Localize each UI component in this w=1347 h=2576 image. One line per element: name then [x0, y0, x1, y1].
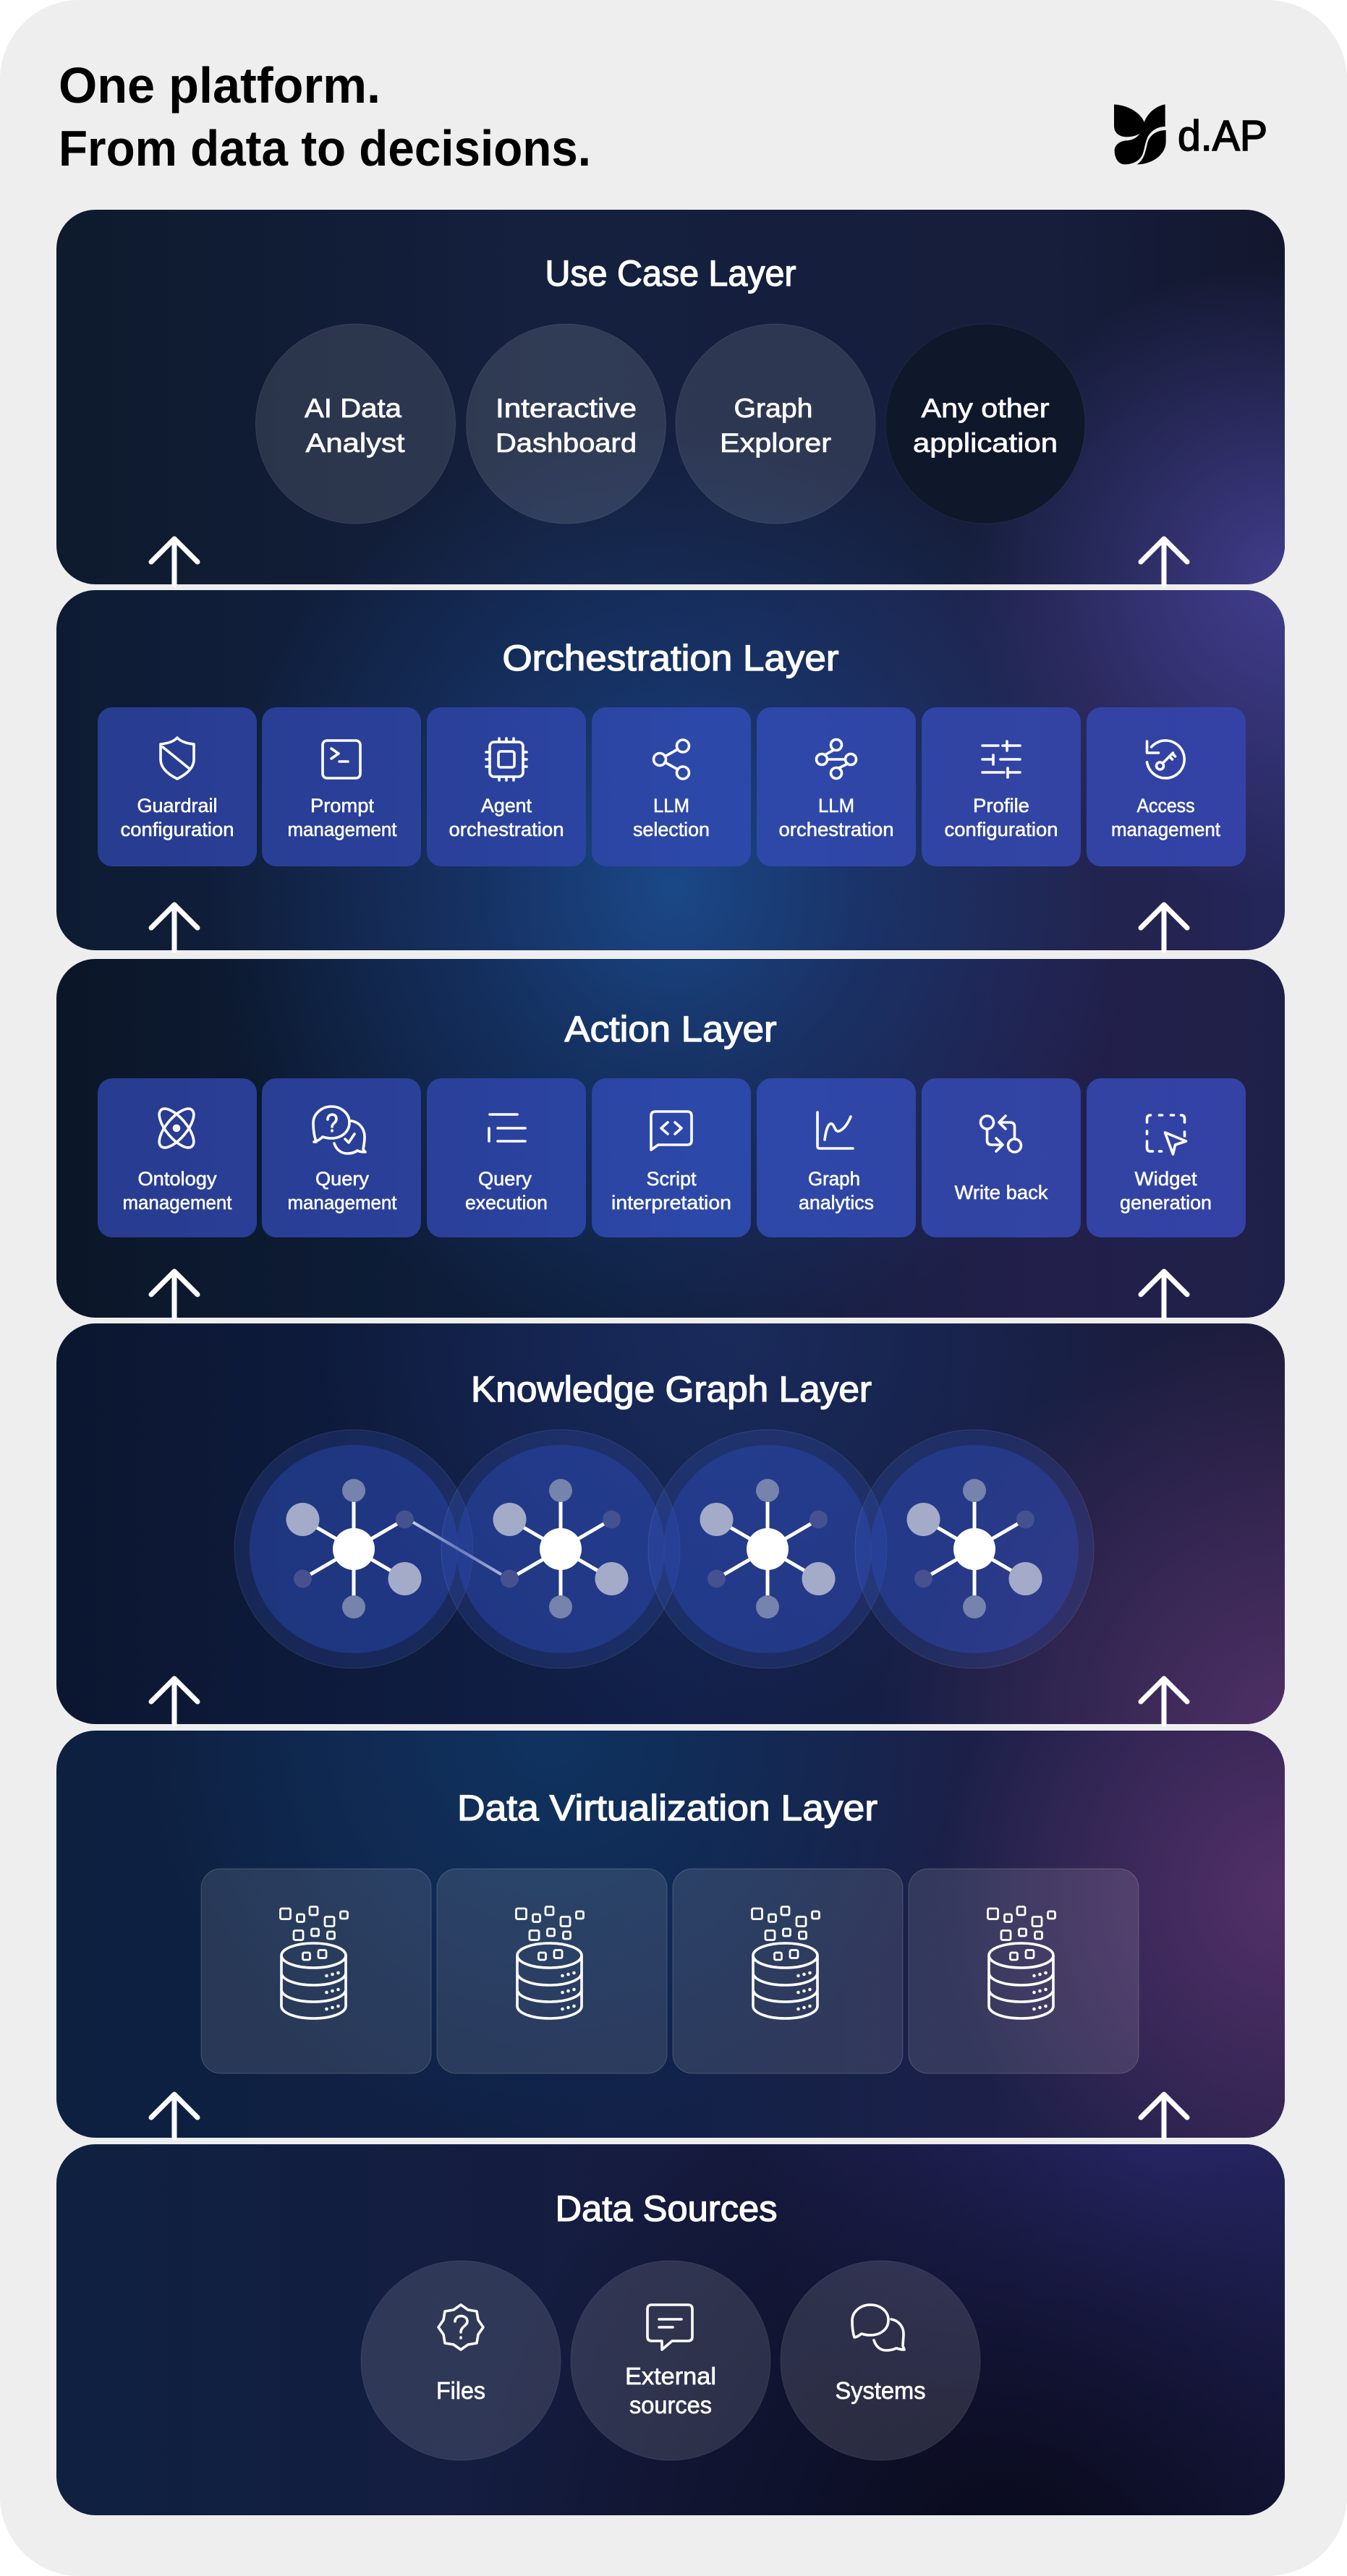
arrow: left, action [151, 1271, 197, 1318]
card: Access management [1087, 707, 1246, 866]
panel: Orchestration Layer [56, 590, 1285, 950]
circle: Systems [781, 2261, 980, 2460]
card: LLM orchestration: orchestration [778, 819, 894, 840]
card: Profile configuration: Profile [973, 795, 1029, 816]
card: Query execution: execution [465, 1192, 548, 1214]
icon: terminal [323, 741, 360, 778]
circle: Files: Files [436, 2377, 485, 2404]
panel: Data Sources [56, 2144, 1285, 2515]
arrow: left, knowledge graph [151, 1679, 197, 1724]
icon: message [647, 2305, 692, 2350]
card: Prompt management: management [288, 819, 397, 840]
circle: External sources [571, 2261, 770, 2460]
card: Profile configuration [922, 707, 1081, 866]
card: Widget generation: generation [1120, 1192, 1212, 1214]
title: From data to decisions. [59, 120, 591, 176]
arrow: left, use case [151, 539, 197, 584]
card: Write back: Write back [955, 1182, 1048, 1203]
icon: key refresh [1147, 741, 1184, 778]
circle: Interactive Dashboard: Dashboard [496, 428, 637, 458]
icon: shield [161, 738, 194, 779]
card: Write back [922, 1078, 1081, 1237]
card: Query management [262, 1078, 421, 1237]
card: Prompt management [262, 707, 421, 866]
arrow: right, data virtualization [1141, 2094, 1187, 2138]
arrow: left, orchestration [151, 905, 197, 950]
card: Access management: management [1111, 819, 1221, 840]
circle: Graph Explorer [676, 324, 875, 524]
icon: question badge [438, 2305, 483, 2350]
icon: sliders [982, 741, 1020, 777]
icon: database [517, 1906, 583, 2018]
circle: Graph Explorer: Explorer [720, 428, 831, 458]
card: Script interpretation [592, 1078, 751, 1237]
card: LLM orchestration: LLM [818, 795, 854, 816]
logo: d.AP: d.AP [1178, 112, 1267, 160]
icon: code bubble [651, 1112, 692, 1150]
heading: Orchestration Layer: Orchestration Layer [502, 638, 839, 678]
heading: Data Sources: Data Sources [556, 2188, 777, 2229]
circle: Systems: Systems [835, 2377, 926, 2404]
card: Graph analytics: analytics [799, 1192, 874, 1214]
circle: Graph Explorer: Graph [734, 393, 813, 423]
card: Ontology management: management [123, 1192, 232, 1214]
circle: Interactive Dashboard [466, 324, 666, 524]
link between clusters [413, 1522, 501, 1574]
icon: sync branches [981, 1116, 1021, 1152]
graph node cluster 3 [648, 1430, 887, 1668]
icon: database [988, 1906, 1055, 2018]
arrow: right, orchestration [1141, 905, 1187, 950]
panel: Knowledge Graph Layer [56, 1323, 1285, 1724]
arrow: right, knowledge graph [1141, 1679, 1187, 1724]
card: Prompt management: Prompt [310, 795, 375, 816]
card: Access management: Access [1137, 795, 1195, 816]
circle: Any other application: application [913, 428, 1058, 458]
card: database 2 [437, 1869, 667, 2073]
card: Ontology management: Ontology [137, 1168, 217, 1190]
icon: question and check bubbles [313, 1106, 365, 1153]
circle: Files [361, 2261, 561, 2460]
circle: Any other application: Any other [922, 393, 1049, 423]
card: Ontology management [98, 1078, 257, 1237]
heading: Knowledge Graph Layer: Knowledge Graph Layer [471, 1369, 872, 1409]
icon: line chart [817, 1112, 853, 1148]
icon: atom [153, 1104, 200, 1153]
card: Agent orchestration [427, 707, 586, 866]
card: database 1 [201, 1869, 431, 2073]
panel: Action Layer [56, 959, 1285, 1318]
circle: AI Data Analyst [256, 324, 456, 524]
card: LLM selection: LLM [653, 795, 689, 816]
icon: list lines [489, 1114, 525, 1141]
heading: Data Virtualization Layer: Data Virtualization Layer [457, 1788, 878, 1828]
icon: database [752, 1906, 819, 2018]
card: Widget generation [1087, 1078, 1246, 1237]
arrow: left, data virtualization [151, 2094, 197, 2138]
circle: Interactive Dashboard: Interactive [496, 393, 637, 423]
graph node cluster 2 [441, 1430, 680, 1668]
card: Query execution [427, 1078, 586, 1237]
card: Profile configuration: configuration [945, 819, 1058, 840]
heading: Action Layer: Action Layer [564, 1009, 777, 1049]
card: database 4 [909, 1869, 1139, 2073]
card: Guardrail configuration [98, 707, 257, 866]
card: Query management: Query [315, 1168, 370, 1190]
heading: Use Case Layer: Use Case Layer [545, 253, 796, 294]
arrow: right, use case [1141, 539, 1187, 584]
card: LLM orchestration [757, 707, 916, 866]
icon: network [816, 739, 857, 778]
title: One platform. [59, 57, 381, 114]
circle: AI Data Analyst: Analyst [305, 428, 405, 458]
graph node cluster 4 [855, 1430, 1094, 1668]
arrow: right, action [1141, 1271, 1187, 1318]
panel: Data Virtualization Layer [56, 1731, 1285, 2138]
title [59, 57, 591, 176]
card: Agent orchestration: orchestration [449, 819, 564, 840]
circle: AI Data Analyst: AI Data [305, 393, 401, 423]
card: Guardrail configuration: Guardrail [137, 795, 217, 816]
card: LLM selection [592, 707, 751, 866]
card: LLM selection: selection [633, 819, 710, 840]
icon: chat bubbles [852, 2305, 904, 2350]
card: Query execution: Query [478, 1168, 532, 1190]
card: Graph analytics [757, 1078, 916, 1237]
graph node cluster 1 [234, 1430, 473, 1668]
circle: Any other application [885, 324, 1085, 524]
icon: chip [486, 738, 527, 780]
icon: database [281, 1906, 347, 2018]
card: Script interpretation: interpretation [611, 1192, 731, 1214]
card: Widget generation: Widget [1134, 1168, 1197, 1190]
icon: share nodes [654, 740, 689, 779]
card: Graph analytics: Graph [808, 1168, 860, 1190]
card: Script interpretation: Script [647, 1168, 697, 1190]
card: Query management: management [288, 1192, 397, 1214]
card: database 3 [673, 1869, 903, 2073]
card: Guardrail configuration: configuration [120, 819, 234, 840]
circle: External sources: sources [629, 2392, 712, 2418]
card: Agent orchestration: Agent [481, 795, 532, 816]
logo: d.AP [1114, 104, 1267, 164]
icon: dashed cursor [1147, 1115, 1186, 1154]
circle: External sources: External [625, 2363, 716, 2389]
panel: Use Case Layer [56, 210, 1285, 584]
